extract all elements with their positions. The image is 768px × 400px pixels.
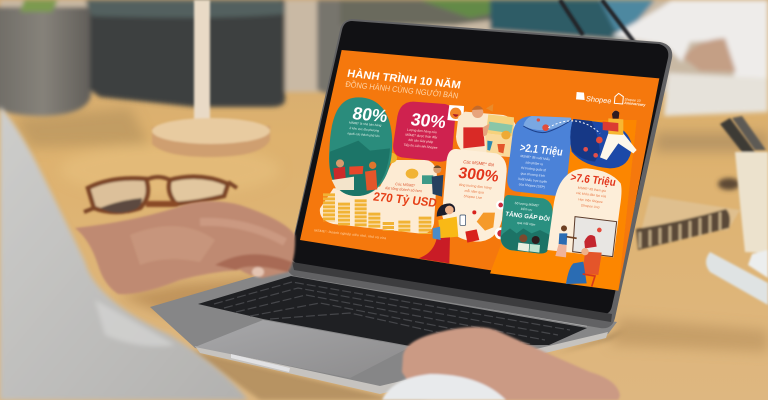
man with laptop (422, 165, 443, 197)
description (403, 128, 438, 150)
dark storage box (90, 0, 285, 107)
phone (460, 215, 466, 225)
palm and fingers (75, 201, 295, 294)
small heart (472, 210, 476, 214)
body (559, 233, 567, 245)
seller head (519, 234, 527, 242)
title: HÀNH TRÌNH 10 NĂM (346, 67, 462, 92)
arm (483, 123, 490, 137)
heading (345, 67, 462, 100)
courier head (369, 162, 376, 169)
shopee wordmark: Shopee (585, 94, 612, 105)
description: tăng trưởng đơn hàng (459, 183, 492, 190)
map land (570, 119, 600, 162)
dark spot (718, 178, 740, 190)
legs (555, 244, 567, 257)
keyboard keys (214, 282, 570, 344)
laptop screen infographic (300, 50, 659, 291)
description: Tiếp thị Liên kết Shopee (403, 143, 438, 150)
head (581, 248, 589, 255)
panel shape (393, 102, 455, 162)
stat: 80% (351, 103, 390, 126)
panel shape (329, 97, 392, 196)
description (576, 186, 607, 209)
seated student (566, 248, 602, 287)
description: bởi các Giải pháp (408, 138, 434, 144)
description: Shopee Live (463, 194, 483, 200)
right shadow band (610, 318, 768, 352)
classroom board (573, 217, 617, 257)
stat: >7.6 Triệu (569, 172, 617, 189)
woman in yellow (418, 203, 458, 263)
lamp post (194, 0, 210, 122)
lamp base side (152, 126, 270, 157)
student legs (566, 262, 587, 284)
stat: >2.1 Triệu (519, 142, 564, 159)
body (432, 175, 443, 197)
sticker mouth (453, 114, 459, 117)
description: MSME* được thúc đẩy (405, 133, 438, 139)
running woman (600, 111, 637, 160)
two sellers (518, 234, 540, 253)
description: Lượng đơn hàng của (407, 128, 437, 134)
emoji sticker (447, 105, 464, 122)
panel shape (320, 160, 437, 234)
shirt cuff (382, 374, 506, 400)
background hand (683, 38, 736, 72)
description: Học Viện Shopee (578, 197, 603, 204)
face (445, 206, 454, 214)
desk lighting patches (14, 108, 768, 352)
sticker card (447, 105, 464, 122)
map water (523, 116, 572, 130)
temple arm (146, 201, 178, 207)
left desk shade (14, 108, 150, 148)
bag (433, 227, 441, 240)
map pin 2 (583, 147, 588, 152)
map pin 3 (593, 153, 598, 158)
heart 2 (497, 230, 504, 237)
intro: Số lượng MSME* (514, 201, 540, 208)
left lens reflection (100, 198, 142, 213)
shelf stripe (488, 122, 513, 133)
shelf (486, 114, 514, 137)
hand shadow on desk (118, 278, 285, 316)
head (433, 165, 441, 173)
courier figure (365, 162, 377, 191)
caption line 2: đạt tổng doanh số hơn (385, 186, 422, 193)
hair (433, 165, 441, 168)
panel shape (442, 149, 507, 242)
trackpad lip (231, 354, 290, 372)
body (463, 127, 485, 148)
anniversary badge (614, 93, 623, 104)
base shadow (190, 330, 625, 400)
blurred background objects (0, 0, 768, 190)
t-shirt icon (497, 144, 505, 153)
top (438, 217, 458, 238)
right hand (402, 327, 620, 400)
subtitle: ĐỒNG HÀNH CÙNG NGƯỜI BÁN (345, 79, 459, 100)
stat: 300% (457, 165, 500, 186)
panel: 30 percent (393, 102, 455, 162)
glasses (84, 177, 237, 213)
caption: Các MSME* (395, 182, 416, 188)
description: của Shopee (SEP) (518, 182, 545, 189)
white markers (706, 252, 768, 305)
plant pot (0, 7, 91, 116)
base deck (150, 266, 617, 392)
description: ngoài các thành phố lớn (347, 131, 380, 138)
panel shape (456, 112, 517, 157)
seller head (336, 159, 344, 167)
seller body (518, 243, 529, 252)
description: thị trường quốc tế (521, 166, 547, 172)
panel: 7.6 million (547, 168, 622, 257)
student hair (584, 235, 597, 248)
map blob (570, 119, 632, 168)
sticker face (450, 108, 461, 119)
map pin small (537, 118, 540, 122)
notebook spiral (636, 209, 730, 250)
pens in background (560, 0, 634, 42)
seller body 2 (529, 244, 540, 253)
person's shirt foreground (0, 106, 248, 400)
map pin (542, 124, 549, 131)
stat: 30% (409, 109, 448, 132)
shopee logos (576, 92, 647, 107)
screen orange background (300, 50, 659, 291)
heart (498, 203, 503, 207)
upper right shade (655, 132, 768, 152)
blue background (490, 0, 650, 40)
mountains (329, 141, 390, 196)
finger highlight (200, 222, 285, 242)
footnote: MSME*: Doanh nghiệp siêu nhỏ, nhỏ và vừa (314, 228, 387, 240)
panel shape (501, 195, 553, 253)
coin stacks (329, 193, 425, 234)
hinge highlight (290, 273, 587, 326)
lid frame (287, 19, 672, 328)
skirt (418, 237, 450, 263)
white shirt in background (612, 0, 768, 80)
shirt body (0, 106, 248, 400)
head (472, 107, 483, 118)
lit area (60, 144, 280, 196)
hinge band (292, 262, 612, 322)
hair (437, 203, 455, 217)
description (518, 154, 551, 189)
red envelope (465, 229, 479, 243)
chair back (583, 252, 602, 275)
laptop lid (287, 19, 672, 328)
top (608, 118, 623, 135)
legs (600, 133, 637, 160)
man in red (463, 104, 493, 148)
left hand (75, 201, 295, 294)
notebook paper (640, 196, 740, 235)
panel: 300 percent (442, 149, 507, 243)
description: các khóa đào tạo của (576, 191, 607, 198)
teacher (555, 225, 577, 257)
right hand and cuff (382, 327, 620, 400)
panel: teal double growth (501, 195, 553, 254)
shopee bag (576, 92, 585, 100)
coin (406, 169, 418, 179)
speaker (501, 131, 511, 139)
panel: 80 percent (329, 97, 392, 196)
heart badge 2 (495, 227, 507, 239)
pin (597, 228, 602, 232)
stat: 270 Tỷ USD (372, 189, 438, 210)
counter (332, 177, 354, 190)
seller head 2 (532, 236, 540, 244)
left lens (88, 178, 148, 212)
heart badge (496, 200, 505, 210)
bezel (291, 21, 668, 314)
second pot with plant (317, 0, 345, 100)
crowd (501, 228, 550, 254)
thumbs up (477, 213, 495, 231)
floating coin (384, 153, 397, 163)
hair (612, 111, 619, 119)
chair leg (583, 274, 595, 287)
description: mỗi năm qua (464, 188, 485, 195)
route (548, 121, 600, 133)
panel: seller illustration (456, 104, 517, 157)
pen cup (735, 152, 768, 253)
right lens (169, 177, 228, 204)
map line (523, 120, 572, 133)
box lid (85, 0, 285, 18)
parcel (603, 122, 618, 132)
bridge and arms (84, 177, 237, 212)
panel shape (507, 116, 573, 196)
description: MSME* đã xuất khẩu (520, 154, 551, 161)
megaphone (486, 104, 493, 112)
arm (567, 237, 577, 238)
keyboard (198, 276, 587, 346)
description (459, 183, 492, 200)
papers (664, 73, 768, 116)
intro: Các MSME* đạt (463, 159, 495, 167)
panel: 270 billion USD (320, 153, 443, 234)
map pin (596, 137, 603, 143)
courier body (365, 170, 377, 191)
panel shape (547, 168, 622, 257)
anniversary text line 2: Anniversary (624, 101, 647, 107)
description: ở khu vực địa phương (349, 126, 380, 133)
stat: TĂNG GẤP ĐÔI (505, 210, 551, 223)
knuckle shading (130, 226, 215, 265)
description: Xuất khẩu trực tuyến (518, 177, 548, 184)
shirt fold highlight (95, 300, 175, 346)
description: (Shopee Uni) (581, 203, 600, 209)
anniversary text: Shopee 10 (624, 97, 641, 103)
seller body (333, 167, 346, 185)
front edge (195, 332, 608, 394)
head (561, 225, 567, 231)
plant leaves (20, 0, 58, 12)
parcel (349, 166, 363, 175)
footer: qua mỗi năm (517, 220, 536, 227)
fingertip (252, 267, 264, 277)
tag icon (487, 141, 493, 151)
description: qua chương trình (520, 171, 546, 178)
laptop base (150, 266, 625, 400)
hair (472, 106, 483, 110)
gift and hearts (460, 200, 507, 243)
description (347, 121, 382, 138)
boxes (485, 133, 513, 157)
seller figure (332, 159, 354, 190)
head (612, 111, 619, 117)
lamp base top (152, 118, 270, 144)
intro line 2: kiếm ưu (520, 207, 533, 212)
panel: 2.1 million (507, 116, 573, 196)
trackpad (195, 320, 410, 378)
pens in cup (720, 118, 755, 152)
panel: map with running woman (548, 111, 637, 168)
back wall (0, 0, 768, 92)
finger shadow (215, 254, 292, 272)
description: sản phẩm ra (525, 160, 544, 166)
description: MSME* là nhà bán hàng (349, 121, 382, 127)
description: MSME* đã tham gia (577, 186, 606, 193)
laptop (422, 175, 433, 184)
